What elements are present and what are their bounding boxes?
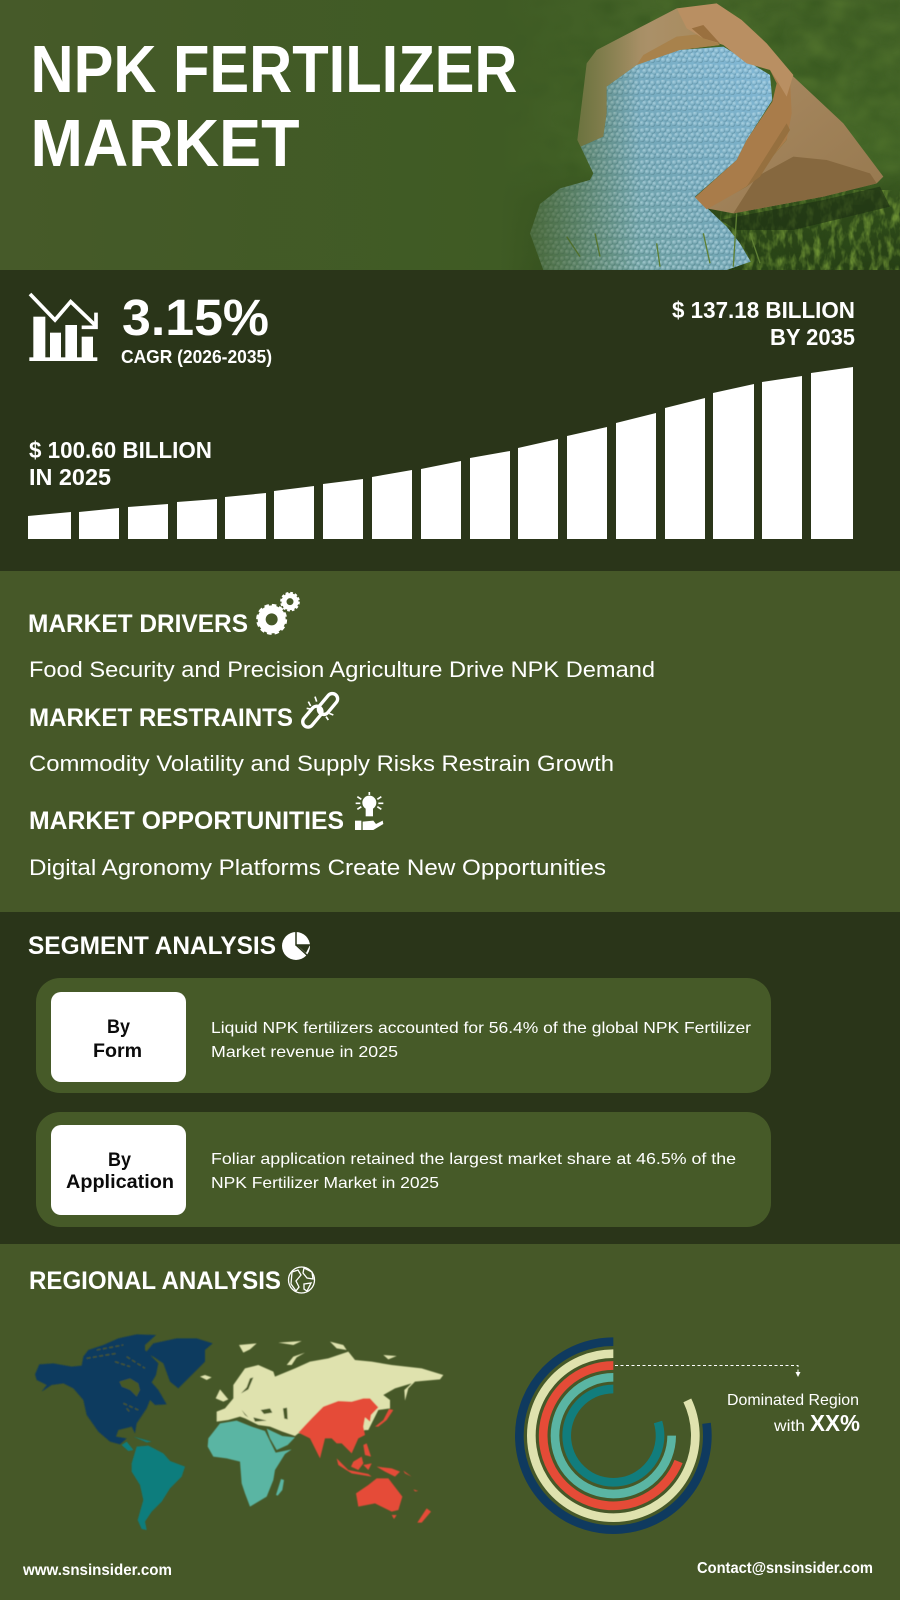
map: eurasia bbox=[200, 1341, 443, 1436]
text: by form bbox=[211, 1020, 752, 1061]
label box: by form bbox=[51, 992, 186, 1082]
text: by application: NPK Fertilizer Market in 2025 bbox=[211, 1175, 439, 1192]
icon: chart with falling arrow bbox=[29, 294, 97, 361]
icon: globe bbox=[288, 1267, 314, 1293]
title: MARKET bbox=[30, 106, 300, 181]
footer: contact: Contact@snsinsider.com bbox=[697, 1560, 873, 1577]
text: opportunities: Digital Agronomy Platforms Create New Opportunities bbox=[29, 855, 606, 880]
icon: pie chart bbox=[282, 930, 313, 960]
bar chart bbox=[28, 367, 853, 539]
title: NPK FERTILIZER bbox=[30, 32, 518, 107]
panel: market dynamics bbox=[28, 593, 655, 880]
heading: market restraints: MARKET RESTRAINTS bbox=[29, 704, 293, 732]
text: by form: Market revenue in 2025 bbox=[211, 1044, 398, 1061]
text: by application: Foliar application retained the largest market share at 46.5% of the bbox=[211, 1151, 736, 1168]
2035 value: BY 2035 bbox=[770, 324, 855, 350]
label box: by application: By bbox=[108, 1150, 131, 1171]
callout: dominated region: XX% bbox=[810, 1410, 860, 1436]
label box: by form: Form bbox=[93, 1041, 142, 1062]
label box: by application: Application bbox=[66, 1172, 174, 1193]
text: restraints: Commodity Volatility and Supply Risks Restrain Growth bbox=[29, 751, 614, 776]
callout: dominated region: with bbox=[773, 1418, 805, 1435]
text: drivers: Food Security and Precision Agriculture Drive NPK Demand bbox=[29, 657, 655, 682]
panel: regional analysis bbox=[29, 1267, 860, 1530]
card: by application bbox=[36, 1112, 771, 1227]
icon: gears bbox=[258, 593, 299, 633]
icon: bulb in hand bbox=[355, 792, 383, 830]
map: africa bbox=[208, 1421, 295, 1507]
callout: dominated region: Dominated Region bbox=[727, 1392, 859, 1409]
CAGR label: CAGR (2026-2035) bbox=[121, 347, 272, 367]
2035 value bbox=[672, 297, 855, 350]
label box: by form: By bbox=[107, 1017, 130, 1038]
callout: dominated region bbox=[727, 1392, 860, 1436]
title bbox=[30, 32, 518, 181]
dashed arrow bbox=[615, 1366, 800, 1377]
photo: fertilizer sack on grass bbox=[530, 0, 900, 270]
panel: market size bbox=[0, 270, 900, 571]
map: south america bbox=[122, 1437, 185, 1530]
label box: by application bbox=[51, 1125, 186, 1215]
world map bbox=[35, 1334, 443, 1530]
heading: market opportunities: MARKET OPPORTUNITIES bbox=[29, 807, 344, 835]
2025 value bbox=[29, 437, 212, 490]
panel: header bbox=[0, 0, 900, 273]
card: by form bbox=[36, 978, 771, 1093]
fade overlay bbox=[480, 0, 645, 270]
footer: website: www.snsinsider.com bbox=[22, 1562, 172, 1579]
2025 value: $ 100.60 BILLION bbox=[29, 437, 212, 463]
panel: segment analysis bbox=[0, 912, 900, 1244]
map: asia pacific bbox=[298, 1398, 431, 1523]
text: by application bbox=[211, 1151, 736, 1192]
text: by form: Liquid NPK fertilizers accounted for 56.4% of the global NPK Fertilizer bbox=[211, 1020, 752, 1037]
radial bar chart bbox=[519, 1342, 707, 1530]
heading: segment analysis: SEGMENT ANALYSIS bbox=[28, 932, 276, 960]
map: north america bbox=[35, 1334, 213, 1444]
2035 value: $ 137.18 BILLION bbox=[672, 297, 855, 323]
heading: market drivers: MARKET DRIVERS bbox=[28, 610, 248, 638]
heading: regional analysis: REGIONAL ANALYSIS bbox=[29, 1267, 281, 1295]
CAGR value: 3.15% bbox=[122, 289, 269, 346]
2025 value: IN 2025 bbox=[29, 464, 111, 490]
icon: broken chain bbox=[301, 691, 340, 729]
